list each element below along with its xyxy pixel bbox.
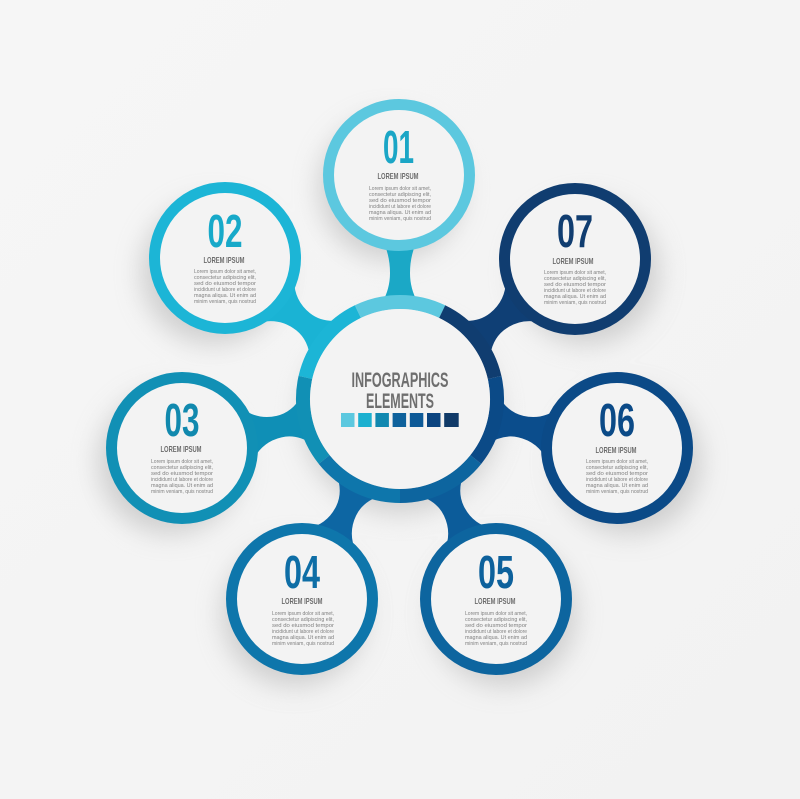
body text 06: minim veniam, quis nostrud — [586, 489, 648, 495]
body text 07: magna aliqua. Ut enim ad — [544, 294, 606, 300]
number 04: 04 — [284, 546, 320, 598]
body text 07: Lorem ipsum dolor sit amet, — [544, 270, 606, 276]
panel: step 04 — [232, 528, 372, 670]
hub title — [352, 369, 448, 413]
panel: step 06 — [546, 378, 688, 518]
segmented hub ring — [303, 302, 497, 496]
body text 04: sed do eiusmod tempor — [272, 623, 334, 629]
body text 01: magna aliqua. Ut enim ad — [369, 210, 431, 216]
panel: step 07 — [504, 188, 646, 330]
body text 01: consectetur adipiscing elit, — [369, 192, 431, 198]
number 01: 01 — [383, 121, 414, 173]
heading 03: LOREM IPSUM — [160, 444, 202, 454]
heading 04: LOREM IPSUM — [282, 596, 322, 606]
panel: step 01 — [328, 104, 470, 246]
body text 01: Lorem ipsum dolor sit amet, — [369, 186, 431, 192]
body text 03: Lorem ipsum dolor sit amet, — [151, 459, 213, 465]
hub title: ELEMENTS — [366, 390, 434, 413]
number 02: 02 — [208, 205, 242, 257]
connector: step 04 — [308, 473, 383, 552]
body text 04 — [272, 611, 334, 647]
body text 04: consectetur adipiscing elit, — [272, 617, 334, 623]
body text 01: sed do eiusmod tempor — [369, 198, 431, 204]
heading 02: LOREM IPSUM — [204, 255, 244, 265]
hub title: INFOGRAPHICS — [352, 369, 448, 392]
body text 05: minim veniam, quis nostrud — [465, 641, 527, 647]
connector: step 01 — [382, 243, 418, 303]
connector: step 07 — [457, 280, 540, 361]
body text 04: minim veniam, quis nostrud — [272, 641, 334, 647]
body text 07: sed do eiusmod tempor — [544, 282, 606, 288]
body text 07: minim veniam, quis nostrud — [544, 300, 606, 306]
body text 06: Lorem ipsum dolor sit amet, — [586, 459, 648, 465]
body text 01: minim veniam, quis nostrud — [369, 216, 431, 222]
body text 03: minim veniam, quis nostrud — [151, 489, 213, 495]
body text 07: consectetur adipiscing elit, — [544, 276, 606, 282]
body text 06: incididunt ut labore et dolore — [586, 477, 648, 483]
number 05: 05 — [478, 546, 514, 598]
body text 05 — [465, 611, 527, 647]
heading 05: LOREM IPSUM — [474, 596, 516, 606]
body text 03: magna aliqua. Ut enim ad — [151, 483, 213, 489]
body text 06: sed do eiusmod tempor — [586, 471, 648, 477]
heading 06: LOREM IPSUM — [596, 445, 636, 455]
body text 04: magna aliqua. Ut enim ad — [272, 635, 334, 641]
panel: step 05 — [426, 528, 566, 670]
panel: central hub — [303, 302, 497, 496]
body text 05: magna aliqua. Ut enim ad — [465, 635, 527, 641]
colour key squares — [341, 413, 459, 427]
body text 03: sed do eiusmod tempor — [151, 471, 213, 477]
number 03: 03 — [164, 394, 200, 446]
body text 04: incididunt ut labore et dolore — [272, 629, 334, 635]
body text 02: consectetur adipiscing elit, — [194, 275, 256, 281]
number 06: 06 — [599, 394, 635, 446]
body text 01 — [369, 186, 431, 222]
body text 03: incididunt ut labore et dolore — [151, 477, 213, 483]
connector: step 03 — [241, 394, 313, 460]
connector: step 05 — [417, 473, 492, 552]
body text 07 — [544, 270, 606, 306]
body text 07: incididunt ut labore et dolore — [544, 288, 606, 294]
body text 02: incididunt ut labore et dolore — [194, 287, 256, 293]
panel: step 02 — [154, 188, 296, 328]
body text 06: magna aliqua. Ut enim ad — [586, 483, 648, 489]
body text 05: consectetur adipiscing elit, — [465, 617, 527, 623]
body text 05: Lorem ipsum dolor sit amet, — [465, 611, 527, 617]
body text 02: Lorem ipsum dolor sit amet, — [194, 269, 256, 275]
heading 01: LOREM IPSUM — [378, 171, 418, 181]
hub disc — [310, 309, 490, 489]
body text 06: consectetur adipiscing elit, — [586, 465, 648, 471]
body text 05: sed do eiusmod tempor — [465, 623, 527, 629]
heading 07: LOREM IPSUM — [552, 256, 594, 266]
body text 02: magna aliqua. Ut enim ad — [194, 293, 256, 299]
body text 03: consectetur adipiscing elit, — [151, 465, 213, 471]
body text 05: incididunt ut labore et dolore — [465, 629, 527, 635]
body text 06 — [586, 459, 648, 495]
body text 03 — [151, 459, 213, 495]
number 07: 07 — [557, 205, 593, 257]
connector: step 06 — [487, 394, 559, 460]
connector: step 02 — [260, 280, 343, 361]
body text 01: incididunt ut labore et dolore — [369, 204, 431, 210]
panel: step 03 — [112, 378, 252, 518]
body text 02 — [194, 269, 256, 305]
body text 02: minim veniam, quis nostrud — [194, 299, 256, 305]
body text 02: sed do eiusmod tempor — [194, 281, 256, 287]
body text 04: Lorem ipsum dolor sit amet, — [272, 611, 334, 617]
